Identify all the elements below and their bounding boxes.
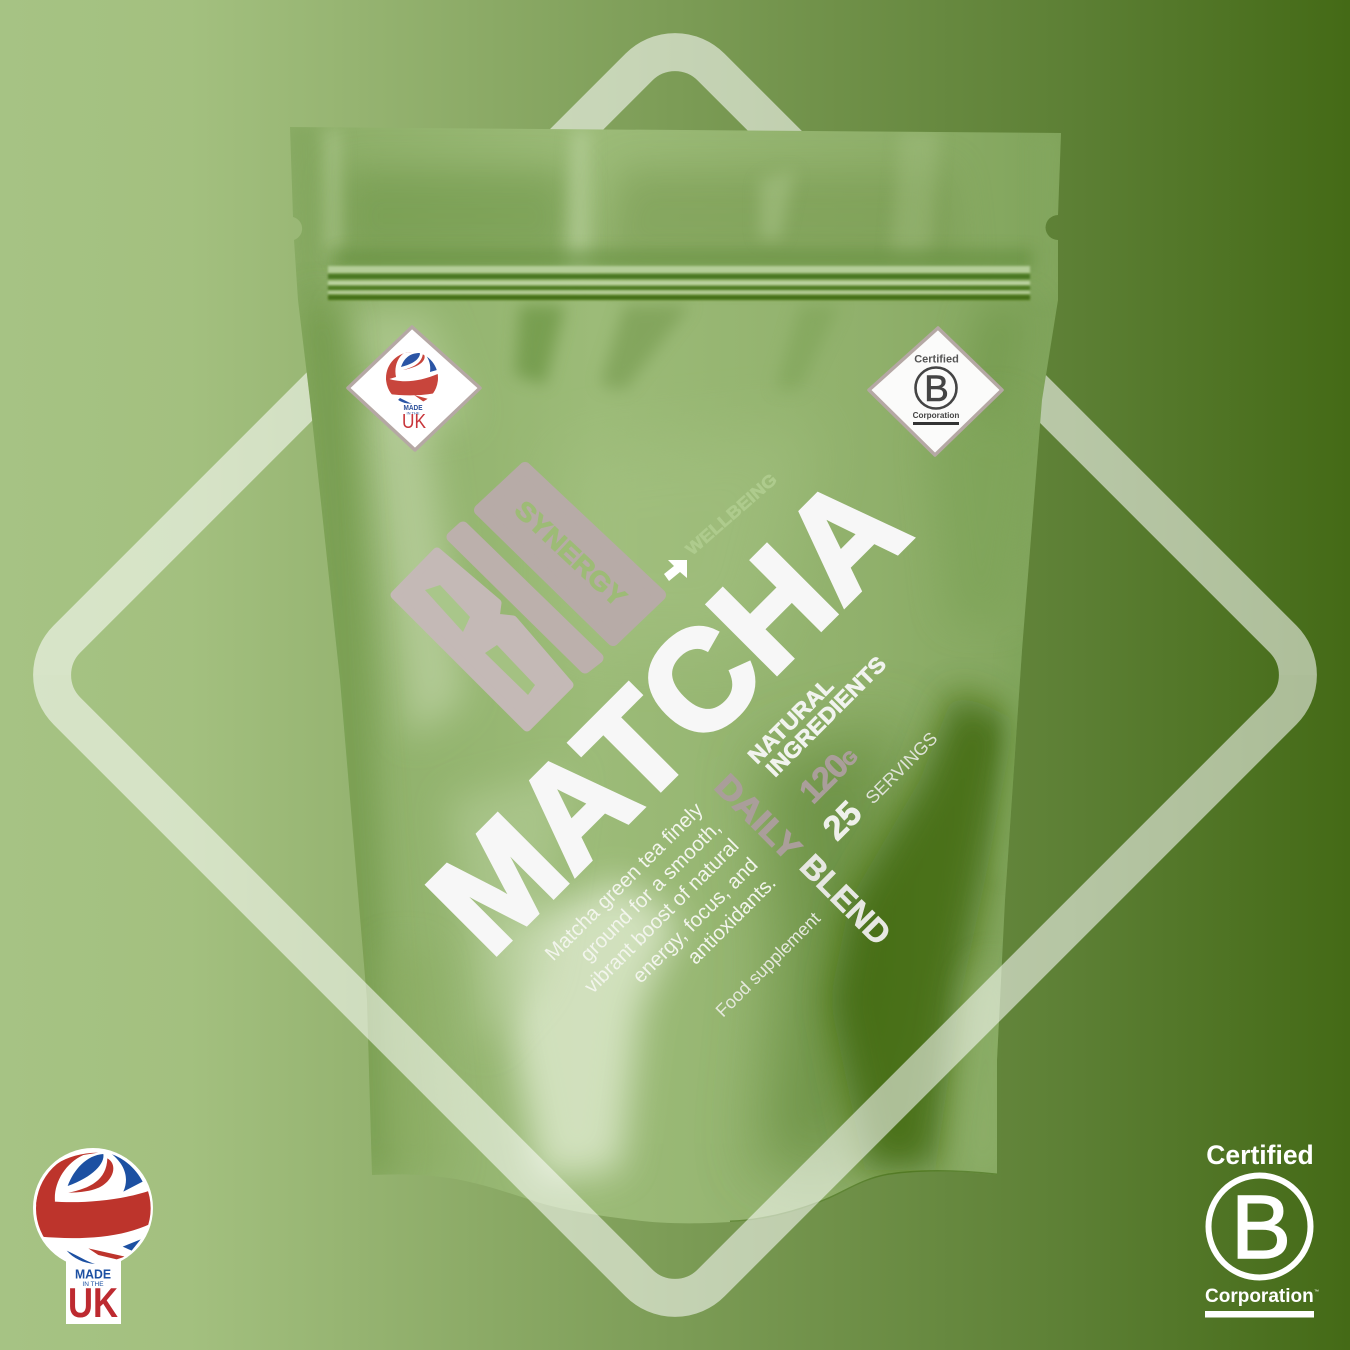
food supplement note: Food supplement — [712, 908, 824, 1021]
logo: certified B corporation — [1205, 1140, 1319, 1318]
title: matcha: MATCHA — [399, 445, 935, 981]
servings: SERVINGS — [862, 728, 941, 808]
daily blend — [708, 767, 898, 952]
daily blend: DAILY — [708, 767, 808, 867]
logo: certified B corporation: ™ — [1314, 1289, 1319, 1295]
logo: made in the UK: MADE — [75, 1268, 111, 1282]
daily blend: BLEND — [793, 847, 898, 952]
badge: made in the UK on pouch: IN THE — [406, 410, 420, 416]
description paragraph: ground for a smooth, — [576, 816, 726, 966]
logo: certified B corporation: B — [1231, 1178, 1291, 1278]
description paragraph: energy, focus, and — [628, 853, 763, 988]
servings: 25 — [816, 794, 869, 848]
description paragraph: Matcha green tea finely — [541, 798, 708, 965]
globe flag — [30, 1153, 152, 1264]
matcha pouch — [280, 120, 1070, 1230]
description paragraph: antioxidants. — [683, 871, 781, 969]
weight 120g: G — [838, 747, 861, 770]
icon: arrow — [664, 560, 687, 581]
weight 120g: 120 — [792, 747, 855, 810]
logo: made in the UK — [30, 1148, 153, 1326]
badge: certified B corporation on pouch: B — [924, 368, 949, 409]
badge: certified B corporation on pouch: Corporation — [913, 411, 959, 420]
pouch bottom edge shadow — [730, 1172, 997, 1222]
servings — [816, 728, 941, 848]
logo: certified B corporation: Certified — [1206, 1140, 1314, 1170]
badge: made in the UK on pouch: MADE — [404, 403, 422, 412]
badge: certified B corporation on pouch: Certified — [914, 354, 959, 366]
zip seal — [328, 266, 1030, 300]
description paragraph: vibrant boost of natural — [580, 834, 744, 998]
logo: made in the UK: IN THE — [82, 1281, 104, 1288]
diamond frame over pouch — [33, 675, 1317, 1317]
bio synergy logo — [395, 468, 660, 727]
natural ingredients: NATURAL — [743, 673, 838, 769]
badge: made in the UK on pouch — [348, 327, 480, 450]
description paragraph — [541, 798, 781, 998]
logo: made in the UK: UK — [68, 1279, 118, 1326]
wellbeing word: WELLBEING — [682, 470, 781, 559]
natural ingredients: INGREDIENTS — [761, 651, 891, 782]
logo word: synergy: SYNERGY — [509, 494, 632, 613]
badge: certified B corporation on pouch — [869, 328, 1002, 455]
badge: made in the UK on pouch: UK — [402, 411, 427, 433]
logo: certified B corporation: Corporation — [1205, 1286, 1314, 1307]
diamond frame behind pouch — [33, 33, 1317, 675]
